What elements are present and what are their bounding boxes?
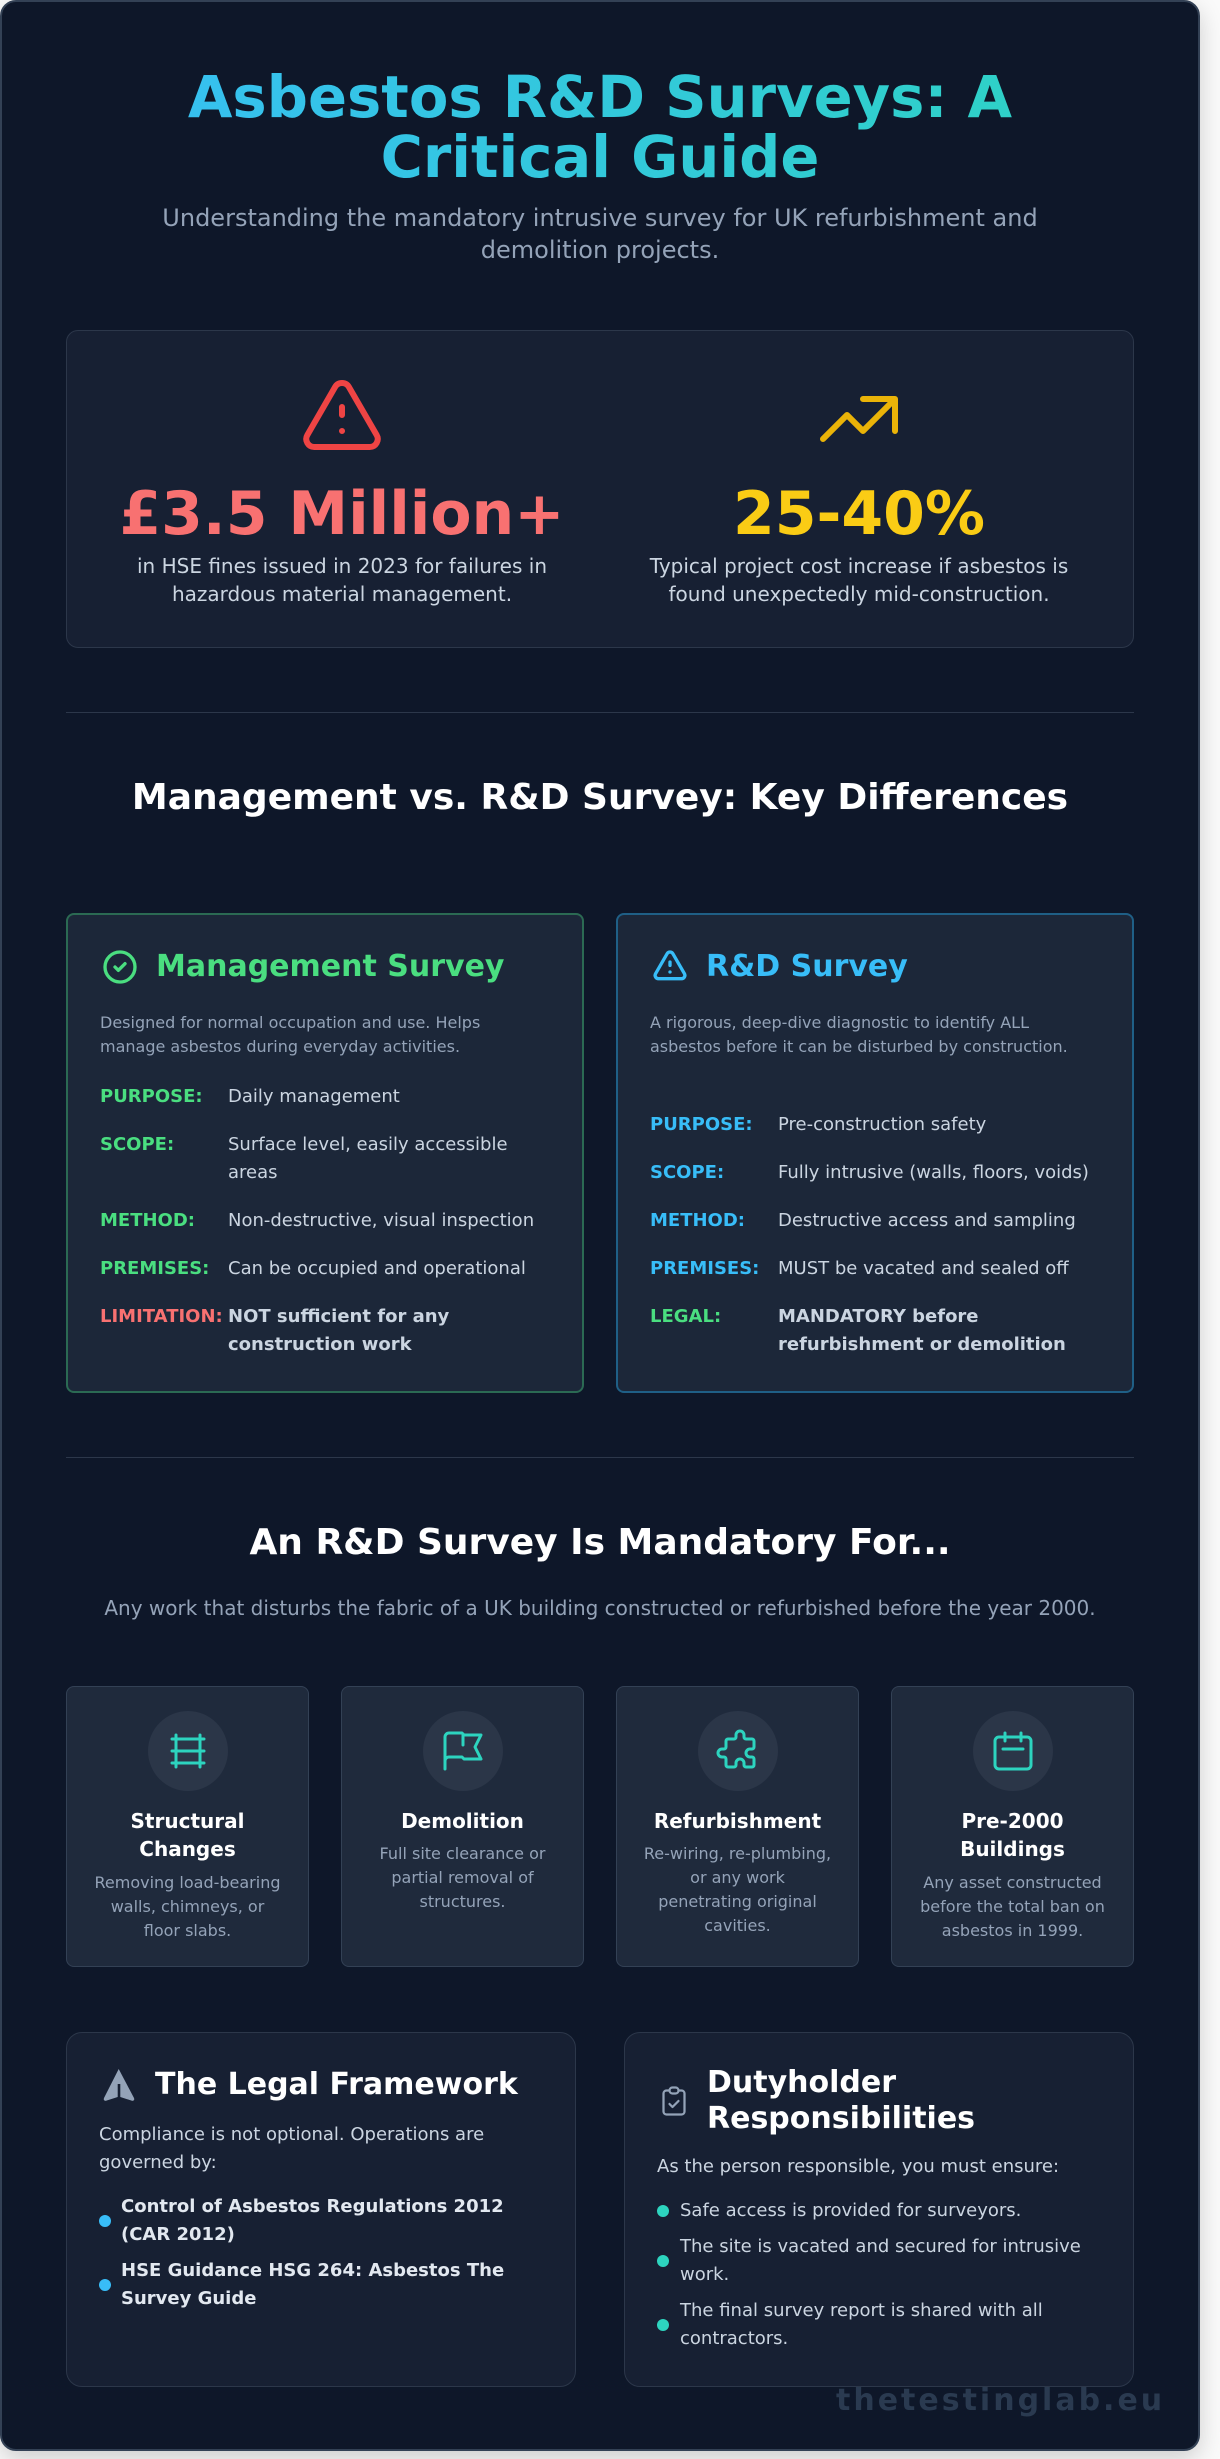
- watermark: thetestinglab.eu: [836, 2383, 1165, 2418]
- row: limitation: LIMITATION:: [100, 1306, 223, 1327]
- row: purpose: [650, 1114, 986, 1135]
- description: asbestos before it can be disturbed by construction.: [650, 1037, 1068, 1056]
- card: refurbishment: [616, 1686, 859, 1967]
- list item: report shared: contractors.: [680, 2328, 788, 2349]
- row: scope: SCOPE:: [100, 1134, 174, 1155]
- icon: clipboard check: [662, 2086, 686, 2116]
- description: A rigorous, deep-dive diagnostic to identify ALL: [650, 1013, 1029, 1032]
- list item: CAR 2012: Control of Asbestos Regulations 2012: [121, 2196, 504, 2217]
- row: method: Destructive access and sampling: [778, 1210, 1076, 1231]
- card title: Structural: [131, 1809, 244, 1833]
- card text: floor slabs.: [144, 1921, 231, 1940]
- heading: dutyholder responsibilities: Dutyholder: [707, 2065, 896, 2100]
- subtitle: demolition projects.: [481, 236, 719, 264]
- icon: warning triangle: [653, 950, 687, 980]
- heading: mandatory for: An R&D Survey Is Mandatory For...: [249, 1522, 951, 1563]
- intro text: [99, 2124, 484, 2173]
- list item: HSG 264: [99, 2260, 504, 2309]
- section description: Any work that disturbs the fabric of a UK building constructed or refurbished before the year 2000.: [104, 1596, 1096, 1620]
- heading: key differences: Management vs. R&D Survey: Key Differences: [132, 777, 1068, 818]
- panel: dutyholder responsibilities: [624, 2032, 1134, 2387]
- panel: legal framework: [66, 2032, 576, 2387]
- panel: key statistics: [66, 330, 1134, 648]
- row: scope: areas: [228, 1162, 278, 1183]
- description: Designed for normal occupation and use. Helps: [100, 1013, 480, 1032]
- stat: cost description: Typical project cost increase if asbestos is: [650, 554, 1068, 578]
- card text: [380, 1844, 546, 1911]
- row: scope: SCOPE:: [650, 1162, 724, 1183]
- row: method: METHOD:: [650, 1210, 745, 1231]
- heading: legal framework: The Legal Framework: [155, 2067, 518, 2102]
- card text: penetrating original: [658, 1892, 817, 1911]
- row: method: Non-destructive, visual inspection: [228, 1210, 534, 1231]
- list item: report shared: The final survey report is shared with all: [680, 2300, 1043, 2321]
- list item: CAR 2012: (CAR 2012): [121, 2224, 235, 2245]
- list item: site vacated: [657, 2236, 1081, 2285]
- row: purpose: Pre-construction safety: [778, 1114, 986, 1135]
- card text: [920, 1873, 1105, 1940]
- list item: CAR 2012: [99, 2196, 504, 2245]
- heading: R&D survey: R&D Survey: [706, 949, 908, 984]
- stat: fines description: in HSE fines issued in 2023 for failures in: [137, 554, 547, 578]
- subtitle: [162, 204, 1038, 264]
- heading: dutyholder responsibilities: [707, 2065, 975, 2136]
- intro text: As the person responsible, you must ensure:: [657, 2156, 1059, 2177]
- row: premises: MUST be vacated and sealed off: [778, 1258, 1069, 1279]
- icon: legal arrowhead: [104, 2069, 134, 2101]
- icon: trending up: [820, 396, 898, 442]
- card text: before the total ban on: [920, 1897, 1105, 1916]
- row: purpose: Daily management: [228, 1086, 400, 1107]
- row: scope: [100, 1134, 508, 1183]
- card text: cavities.: [704, 1916, 771, 1935]
- card title: Pre-2000: [961, 1809, 1064, 1833]
- row: legal: refurbishment or demolition: [778, 1334, 1066, 1355]
- card title: Buildings: [960, 1837, 1065, 1861]
- card text: Any asset constructed: [923, 1873, 1102, 1892]
- icon: warning triangle: [303, 380, 381, 450]
- icon: check circle: [103, 950, 137, 984]
- card text: walls, chimneys, or: [111, 1897, 264, 1916]
- panel: management survey: [66, 913, 584, 1393]
- icon: structural frame: [148, 1711, 228, 1791]
- stat: cost description: found unexpectedly mid-construction.: [668, 582, 1050, 606]
- card: pre-2000 buildings: [891, 1686, 1134, 1967]
- card title: Changes: [139, 1837, 236, 1861]
- row: purpose: PURPOSE:: [650, 1114, 753, 1135]
- row: premises: Can be occupied and operational: [228, 1258, 526, 1279]
- list item: report shared: [657, 2300, 1043, 2349]
- row: premises: PREMISES:: [650, 1258, 759, 1279]
- description: [650, 1013, 1068, 1056]
- row: limitation: [100, 1306, 449, 1355]
- card text: [94, 1873, 280, 1940]
- stat: cost figure: 25-40%: [733, 479, 985, 549]
- title: Critical Guide: [381, 124, 819, 191]
- card text: Re-wiring, re-plumbing,: [644, 1844, 831, 1863]
- description: [100, 1013, 480, 1056]
- card: structural changes: [66, 1686, 309, 1967]
- title: [0, 68, 1200, 202]
- card text: asbestos in 1999.: [942, 1921, 1083, 1940]
- row: premises: [100, 1258, 526, 1279]
- icon: puzzle piece: [698, 1711, 778, 1791]
- list item: HSG 264: Survey Guide: [121, 2288, 256, 2309]
- card title: [960, 1809, 1065, 1861]
- icon: flag: [423, 1711, 503, 1791]
- row: scope: Fully intrusive (walls, floors, voids): [778, 1162, 1089, 1183]
- row: purpose: [100, 1086, 400, 1107]
- list item: safe access: Safe access is provided for surveyors.: [680, 2200, 1021, 2221]
- row: premises: [650, 1258, 1069, 1279]
- description: manage asbestos during everyday activities.: [100, 1037, 460, 1056]
- row: purpose: PURPOSE:: [100, 1086, 203, 1107]
- card text: partial removal of: [391, 1868, 534, 1887]
- stat: fines description: hazardous material management.: [172, 582, 512, 606]
- row: limitation: construction work: [228, 1334, 412, 1355]
- row: premises: PREMISES:: [100, 1258, 209, 1279]
- list item: site vacated: work.: [680, 2264, 729, 2285]
- subtitle: Understanding the mandatory intrusive survey for UK refurbishment and: [162, 204, 1038, 232]
- list item: site vacated: The site is vacated and secured for intrusive: [680, 2236, 1081, 2257]
- card title: Refurbishment: [654, 1809, 821, 1833]
- stat: cost description: [650, 554, 1068, 606]
- title: Asbestos R&D Surveys: A: [188, 64, 1012, 131]
- row: legal: LEGAL:: [650, 1306, 721, 1327]
- icon: calendar: [973, 1711, 1053, 1791]
- panel: R&D survey: [616, 913, 1134, 1393]
- row: scope: Surface level, easily accessible: [228, 1134, 508, 1155]
- stat: fines description: [137, 554, 547, 606]
- card text: [644, 1844, 831, 1935]
- row: legal: [650, 1306, 1066, 1355]
- card: demolition: [341, 1686, 584, 1967]
- card text: structures.: [419, 1892, 506, 1911]
- heading: dutyholder responsibilities: Responsibilities: [707, 2101, 975, 2136]
- row: legal: MANDATORY before: [778, 1306, 979, 1327]
- list item: HSG 264: HSE Guidance HSG 264: Asbestos The: [121, 2260, 504, 2281]
- heading: management survey: Management Survey: [156, 949, 504, 984]
- row: method: [650, 1210, 1076, 1231]
- stat: fines figure: £3.5 Million+: [119, 479, 565, 549]
- card text: Full site clearance or: [380, 1844, 545, 1863]
- row: limitation: NOT sufficient for any: [228, 1306, 449, 1327]
- intro text: governed by:: [99, 2152, 217, 2173]
- row: method: METHOD:: [100, 1210, 195, 1231]
- card title: Demolition: [401, 1809, 524, 1833]
- card text: or any work: [690, 1868, 785, 1887]
- card title: [131, 1809, 244, 1861]
- card text: Removing load-bearing: [94, 1873, 280, 1892]
- intro text: Compliance is not optional. Operations are: [99, 2124, 484, 2145]
